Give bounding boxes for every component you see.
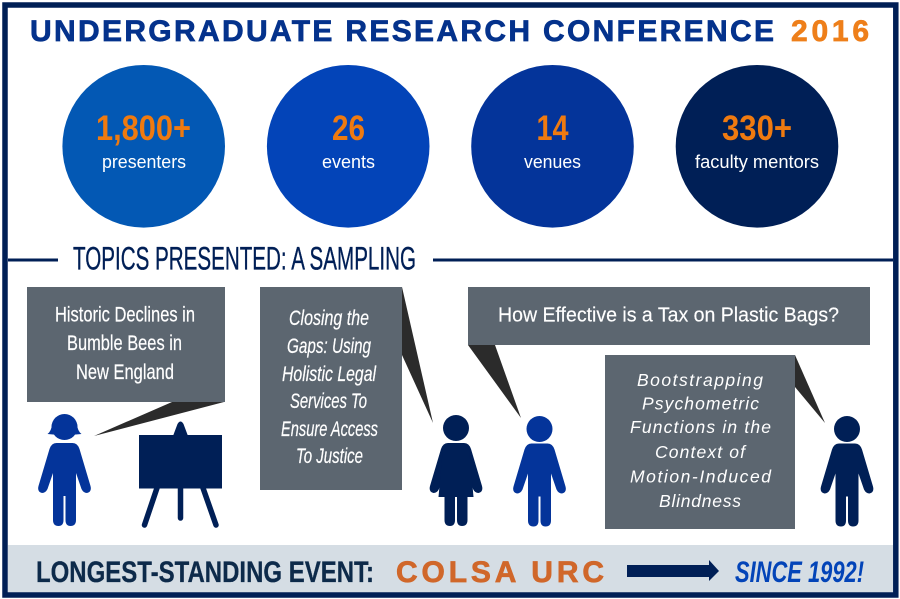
speech bubble: legal services: Closing the: [289, 307, 369, 330]
stat: faculty mentors: 330+: [722, 109, 792, 148]
stat: venues: [471, 65, 634, 228]
speech bubble: plastic bags: [468, 287, 870, 418]
stat: events: [267, 65, 430, 228]
speech bubble: psychometric functions: Motion-Induced: [630, 466, 772, 486]
stat: venues: 14: [536, 109, 569, 148]
speech bubble: bumble bees: New England: [76, 361, 174, 384]
speech bubble: psychometric functions: [605, 355, 825, 529]
speech bubble: psychometric functions: Context of: [655, 442, 747, 462]
icon: man speaking about psychometrics: [821, 416, 873, 526]
icon: woman in dress: [430, 415, 482, 526]
icon: woman presenter with bob hair: [38, 414, 91, 526]
stat: faculty mentors: faculty mentors: [695, 151, 819, 172]
stat: events: 26: [332, 109, 365, 148]
stat: faculty mentors: [676, 65, 838, 228]
bottom banner: [36, 556, 864, 589]
stat: events: events: [322, 151, 375, 172]
speech bubble: plastic bags: How Effective is a Tax on Plastic Bags?: [498, 304, 839, 326]
section heading: TOPICS PRESENTED: A SAMPLING: [73, 240, 416, 276]
banner event name: COLSA URC: [396, 556, 604, 589]
icon: man speaking about plastic bags: [513, 416, 566, 526]
banner label: LONGEST-STANDING EVENT:: [36, 556, 374, 589]
speech bubble: psychometric functions: Psychometric: [642, 394, 759, 414]
bottom banner background: [8, 545, 893, 593]
speech bubble: legal services: Gaps: Using: [287, 335, 371, 358]
speech bubble: legal services: Services To: [290, 390, 367, 413]
speech bubble: bumble bees: [27, 287, 225, 436]
icon: presentation easel: [139, 422, 222, 525]
stat: presenters: 1,800+: [96, 109, 191, 148]
stat: presenters: presenters: [102, 151, 186, 172]
speech bubble: legal services: Holistic Legal: [282, 363, 377, 386]
title text: UNDERGRADUATE RESEARCH CONFERENCE: [30, 15, 774, 48]
title year: 2016: [791, 15, 869, 48]
speech bubble: psychometric functions: Bootstrapping: [637, 370, 763, 390]
speech bubble: bumble bees: Bumble Bees in: [67, 332, 182, 355]
stat: venues: venues: [524, 151, 581, 172]
speech bubble: legal services: To Justice: [296, 445, 363, 468]
speech bubble: bumble bees: Historic Declines in: [55, 304, 195, 326]
speech bubble: psychometric functions: Functions in the: [630, 417, 771, 437]
speech bubble: legal services: Ensure Access: [281, 418, 378, 441]
stat: presenters: [62, 65, 225, 228]
speech bubble: psychometric functions: Blindness: [659, 491, 741, 511]
title: [30, 15, 869, 48]
arrow: [627, 560, 719, 581]
speech bubble: legal services: [260, 287, 433, 490]
